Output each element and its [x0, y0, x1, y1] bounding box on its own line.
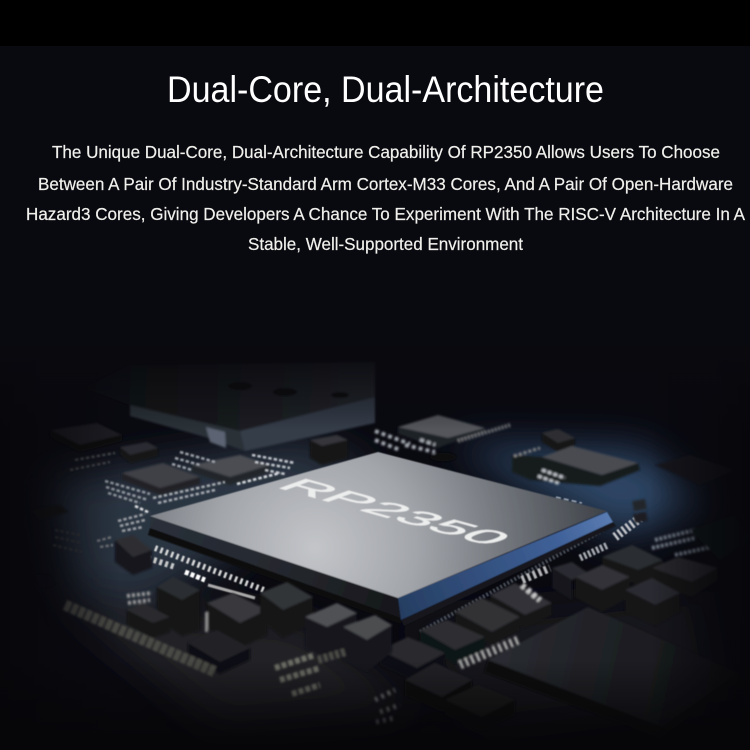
component [405, 663, 472, 712]
upper module [85, 362, 375, 451]
component: R3 [542, 429, 575, 452]
component: R1 pins [458, 425, 510, 441]
lower left components [65, 535, 392, 694]
pads [127, 593, 152, 603]
pads lower [375, 690, 400, 722]
component [420, 620, 485, 664]
component [552, 562, 588, 600]
lower component row [375, 545, 718, 732]
description text [26, 142, 745, 254]
small part [632, 499, 648, 523]
component: C [310, 435, 348, 465]
main chip package [148, 452, 640, 632]
block [343, 615, 392, 672]
pads right [652, 530, 720, 555]
description text: Hazard3 Cores, Giving Developers A Chance To Experiment With The RISC-V Architecture In A [26, 204, 745, 224]
dark right parts [655, 455, 750, 560]
component: D [50, 423, 122, 452]
pads cluster [275, 655, 320, 694]
pads [538, 470, 565, 484]
title: Dual-Core, Dual-Architecture [167, 69, 604, 110]
description text: Between A Pair Of Industry-Standard Arm Cortex-M33 Cores, And A Pair Of Open-Hardware [38, 174, 733, 194]
board glow [50, 440, 720, 730]
component: A [122, 463, 200, 495]
component: E [120, 442, 158, 463]
component [455, 598, 520, 645]
block [305, 603, 357, 658]
block [115, 535, 152, 575]
pads [460, 640, 518, 665]
block [157, 577, 200, 636]
chip right side [398, 512, 613, 620]
component: far left [30, 505, 68, 588]
pads [522, 585, 540, 600]
via hole [430, 452, 456, 462]
component: R1 [398, 415, 485, 448]
block [260, 582, 313, 638]
component [380, 637, 445, 682]
circuit board illustration [0, 345, 750, 750]
block [188, 630, 250, 674]
component [652, 557, 718, 597]
large lower right chip [484, 607, 738, 738]
components right of chip [375, 415, 750, 560]
pin row under chip left [148, 548, 264, 598]
chip marking: RP2350 [267, 475, 523, 549]
pads cluster top [375, 431, 435, 452]
vignette [0, 345, 750, 750]
component [625, 578, 680, 626]
description text: Stable, Well-Supported Environment [248, 234, 523, 254]
solder pads upper left [53, 452, 295, 552]
chip top face [150, 452, 607, 598]
small components left of chip [30, 423, 348, 588]
pad cluster right [318, 652, 345, 660]
chip left side [150, 516, 401, 622]
pin row under chip right [420, 518, 640, 632]
component [445, 685, 515, 732]
pads on chip edge [556, 497, 582, 503]
component [602, 545, 663, 585]
component [575, 565, 630, 612]
description text: The Unique Dual-Core, Dual-Architecture Capability Of RP2350 Allows Users To Choose [52, 142, 720, 162]
component: B [192, 455, 270, 485]
component [490, 583, 552, 628]
block [127, 603, 170, 638]
white sliver [205, 612, 208, 632]
component: R2 [512, 446, 640, 486]
block [207, 593, 267, 648]
resistor strip [65, 605, 215, 672]
